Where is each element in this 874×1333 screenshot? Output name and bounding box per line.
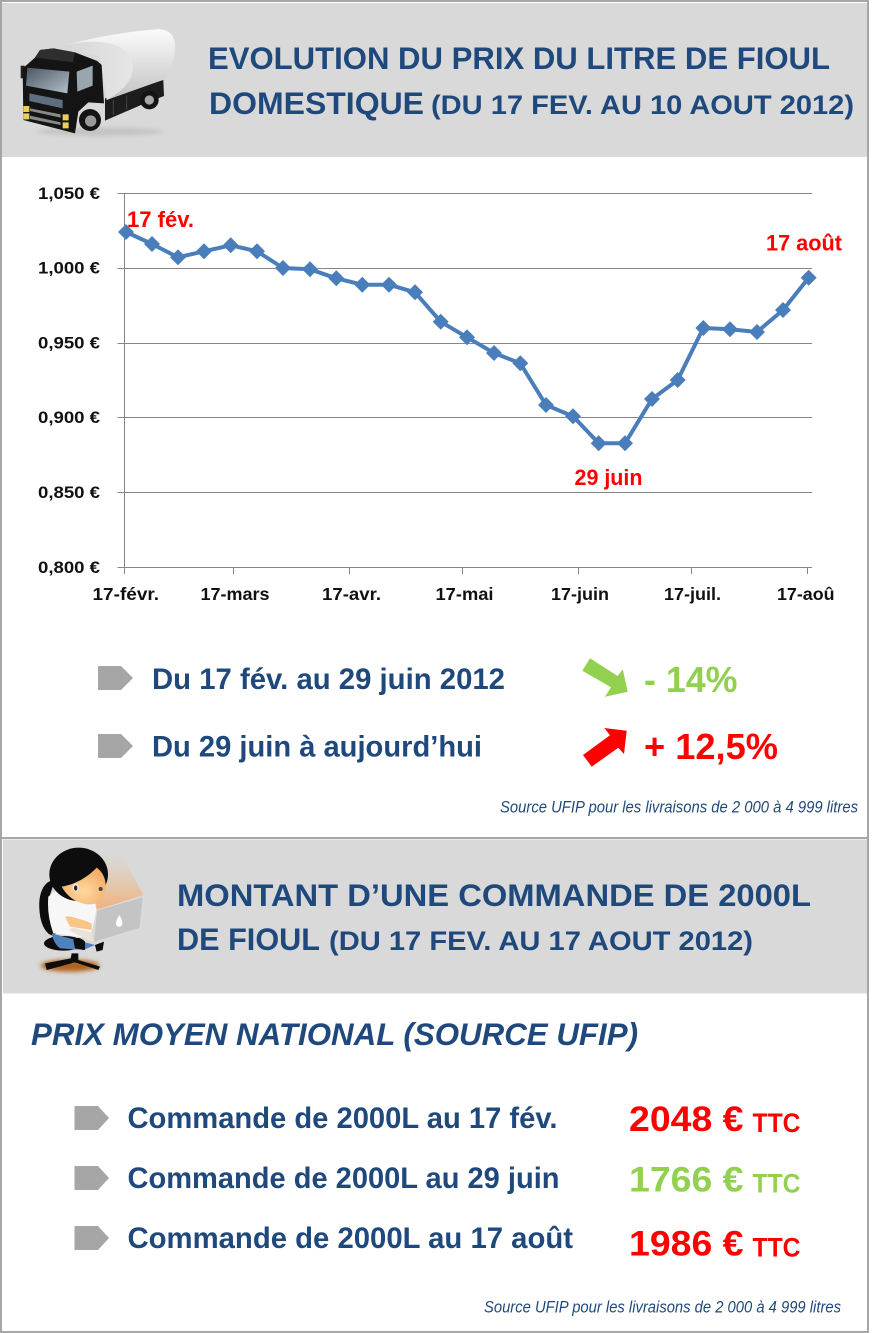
price row: 17 february [74, 1100, 800, 1139]
price row: 17 august [74, 1222, 800, 1264]
variation row: falling price: Du 17 fév. au 29 juin 2012 [152, 663, 505, 696]
icon: tanker truck [21, 29, 175, 136]
x axis labels [92, 584, 834, 604]
annotation: chart dates: 29 juin [574, 465, 642, 490]
annotation: chart dates: 17 fév. [127, 207, 194, 232]
icon: bullet [74, 1226, 109, 1250]
panel: header order amount [3, 840, 867, 994]
heading: fuel price title: EVOLUTION DU PRIX DU LITRE DE FIOUL [208, 40, 830, 76]
arrow: up [583, 728, 627, 767]
variation row: falling price [98, 658, 738, 700]
x axis labels: 17-juin [551, 584, 609, 604]
icon: bullet [74, 1106, 109, 1130]
price row: 29 june [74, 1160, 800, 1200]
panel: header fuel price [2, 3, 867, 157]
arrow: down [582, 658, 628, 697]
y axis labels: 0,850 € [38, 484, 100, 502]
price row: 17 february: TTC [752, 1108, 800, 1138]
price row: 29 june: Commande de 2000L au 29 juin [128, 1162, 560, 1195]
price row: 17 february: Commande de 2000L au 17 fév. [128, 1102, 558, 1135]
y axis labels: 1,050 € [38, 185, 100, 203]
heading: fuel price title: (DU 17 FEV. AU 10 AOUT 2012) [431, 90, 854, 120]
heading: order amount title: DE FIOUL [177, 921, 320, 957]
variation row: rising price: Du 29 juin à aujourd’hui [152, 730, 482, 764]
y axis labels: 0,900 € [38, 409, 100, 427]
variation row: rising price: + 12,5% [644, 726, 778, 767]
annotation: chart dates [127, 207, 843, 490]
y axis labels: 0,950 € [38, 334, 100, 352]
data markers [118, 224, 817, 451]
x axis labels: 17-aoû [777, 584, 834, 604]
icon: bullet [98, 734, 133, 758]
x axis labels: 17-mars [200, 584, 270, 604]
subheading: national average: PRIX MOYEN NATIONAL (SOURCE UFIP) [31, 1016, 638, 1052]
price row: 17 august: 1986 € [629, 1224, 744, 1264]
x axis labels: 17-avr. [322, 584, 381, 604]
y axis labels: 0,800 € [38, 559, 100, 577]
x axis labels: 17-mai [436, 584, 494, 604]
heading: fuel price title: DOMESTIQUE [209, 85, 424, 121]
variation row: rising price [98, 726, 778, 767]
data line [126, 232, 809, 443]
icon: bullet [74, 1166, 109, 1190]
variation row: falling price: - 14% [644, 659, 738, 700]
heading: fuel price title [208, 40, 854, 121]
heading: order amount title: (DU 17 FEV. AU 17 AOUT 2012) [329, 926, 753, 956]
y axis labels [38, 185, 100, 577]
price row: 17 august: TTC [752, 1232, 800, 1262]
icon: person with laptop [39, 848, 143, 972]
source note: order amount: Source UFIP pour les livraisons de 2 000 à 4 999 litres [484, 1298, 841, 1316]
y axis labels: 1,000 € [38, 260, 100, 278]
heading: order amount title: MONTANT D’UNE COMMANDE DE 2000L [177, 877, 811, 913]
x axis labels: 17-juil. [664, 584, 721, 604]
annotation: chart dates: 17 août [766, 230, 843, 256]
price row: 17 august: Commande de 2000L au 17 août [128, 1222, 573, 1255]
line chart: price per litre [38, 185, 843, 604]
icon: bullet [98, 666, 133, 690]
price row: 17 february: 2048 € [629, 1100, 744, 1139]
heading: order amount title [177, 877, 811, 957]
price row: 29 june: TTC [752, 1168, 800, 1198]
price row: 29 june: 1766 € [629, 1160, 744, 1200]
x axis labels: 17-févr. [92, 584, 159, 604]
